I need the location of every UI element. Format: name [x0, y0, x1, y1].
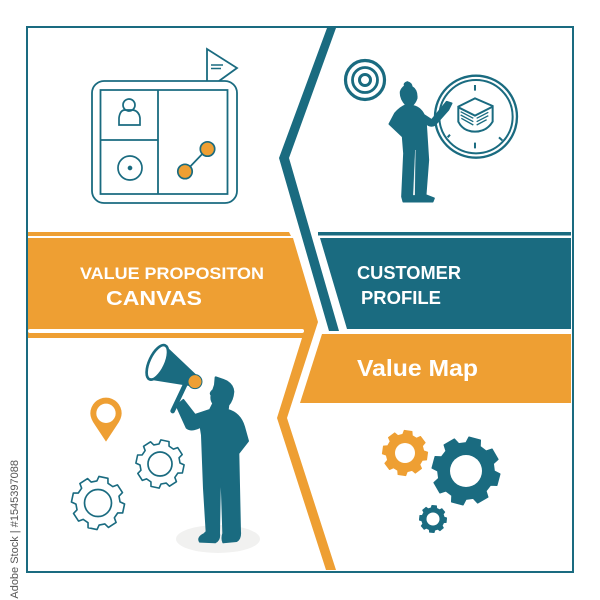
figure: person pointing: [389, 82, 452, 202]
target symbol: [118, 156, 142, 180]
clock rings: [435, 76, 517, 158]
icon: outline gear upper: [132, 436, 188, 492]
board grid: [100, 90, 228, 194]
heading: customer profile: [357, 263, 461, 308]
heading: value propositon canvas: CANVAS: [106, 287, 202, 310]
panel: value proposition band: [28, 232, 336, 570]
connected nodes: [178, 142, 215, 179]
orange arrow band with lower chevron: [28, 238, 336, 570]
teal top stripe: [318, 232, 571, 236]
figure: person with megaphone: [142, 342, 248, 542]
stock id side text: Adobe Stock | #1545397088: [9, 460, 21, 599]
panel: customer profile band: [318, 232, 571, 329]
white gap stripe: [28, 329, 304, 333]
icon: clock with box: [435, 76, 517, 158]
heading: value propositon canvas: VALUE PROPOSITON: [80, 264, 264, 283]
icon: large teal gear: [425, 430, 507, 512]
icon: location pin: [90, 398, 122, 442]
icon: bullseye target: [346, 60, 384, 100]
icon: outline gear lower: [67, 472, 129, 534]
teal chevron divider: [279, 28, 339, 331]
orange band: [300, 334, 571, 403]
heading: value map: Value Map: [357, 355, 478, 381]
heading: customer profile: CUSTOMER: [357, 263, 461, 283]
box: [458, 98, 493, 132]
icon: orange gear: [380, 428, 430, 478]
panel: value map band: [300, 334, 571, 403]
megaphone: [142, 342, 202, 411]
icon: small teal gear: [418, 504, 448, 534]
heading: value propositon canvas: [80, 264, 264, 310]
flag: [207, 49, 237, 81]
board outline: [92, 81, 237, 203]
orange top stripe: [28, 232, 291, 236]
silhouette: [177, 377, 248, 542]
person symbol: [119, 99, 140, 125]
icon: canvas board: [92, 49, 237, 203]
shadow under figure: [176, 525, 260, 553]
teal band: [320, 238, 571, 329]
clock ticks: [448, 85, 502, 148]
heading: customer profile: PROFILE: [361, 288, 441, 308]
